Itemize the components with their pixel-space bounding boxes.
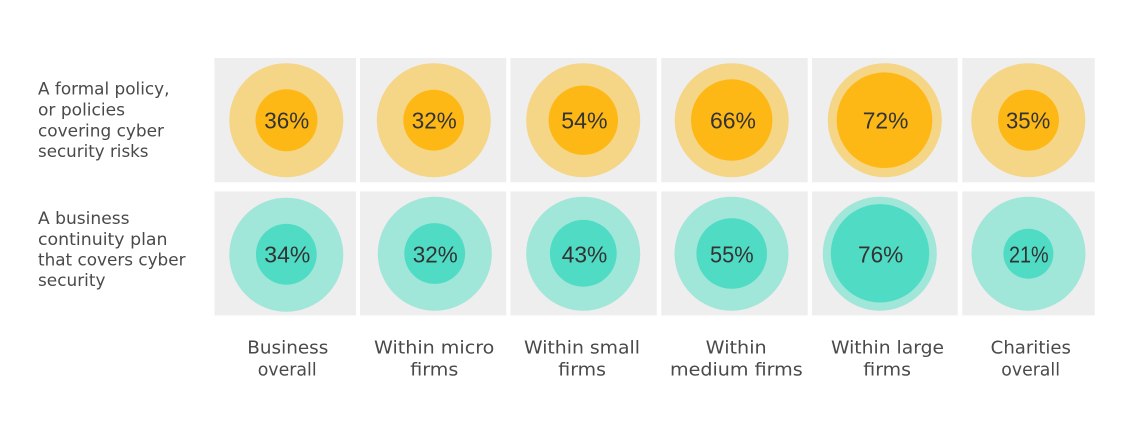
column label: within large firms	[831, 338, 944, 381]
row label: business continuity plan: security	[38, 270, 106, 290]
panel: policy, large firms	[812, 58, 958, 182]
panel: continuity, large firms	[812, 191, 958, 315]
panel: policy, micro firms: 32%	[412, 107, 457, 133]
column label: charities overall: overall	[1001, 361, 1060, 381]
row label: business continuity plan: A business	[38, 208, 130, 228]
panel: policy, large firms: 72%	[863, 107, 908, 133]
column label: within micro firms: firms	[410, 361, 458, 381]
panel: continuity, small firms	[510, 191, 657, 315]
panel: continuity, micro firms	[360, 191, 506, 315]
panel: continuity, micro firms: 32%	[413, 241, 458, 267]
column label: business overall: Business	[247, 338, 328, 358]
panel: policy, business overall	[214, 58, 356, 182]
panel: policy, small firms	[510, 58, 657, 182]
column label: business overall: overall	[258, 361, 317, 381]
column label: within small firms: Within small	[524, 338, 640, 358]
panel: continuity, business overall	[214, 191, 356, 315]
panel: policy, medium firms: 66%	[710, 107, 756, 133]
column label: within medium firms: Within	[706, 338, 767, 358]
column label: within medium firms	[670, 338, 803, 381]
panel: policy, small firms: 54%	[561, 107, 608, 133]
panel: policy, medium firms	[661, 58, 808, 182]
panel: continuity, charities overall	[962, 191, 1095, 315]
panel: policy, charities overall	[962, 58, 1095, 182]
row label: business continuity plan: continuity plan	[38, 229, 168, 249]
panel: policy, charities overall: 35%	[1006, 107, 1050, 133]
column label: within small firms	[524, 338, 640, 381]
row label: formal policy	[38, 78, 170, 161]
row label: formal policy: A formal policy,	[38, 78, 170, 98]
column label: within small firms: firms	[558, 361, 606, 381]
panel: policy, business overall: 36%	[264, 107, 309, 133]
row label: business continuity plan	[38, 208, 186, 290]
column label: within micro firms: Within micro	[374, 338, 494, 358]
panel: continuity, medium firms	[661, 191, 808, 315]
row label: business continuity plan: that covers cyber	[38, 250, 186, 270]
column label: charities overall	[991, 338, 1071, 381]
panel: continuity, medium firms: 55%	[710, 241, 754, 267]
column label: business overall	[247, 338, 328, 381]
row label: formal policy: security risks	[38, 141, 148, 161]
column label: within large firms: firms	[863, 361, 911, 381]
column label: within medium firms: medium firms	[670, 361, 803, 381]
panel: continuity, business overall: 34%	[264, 241, 310, 267]
column label: within large firms: Within large	[831, 338, 944, 358]
panel: policy, micro firms	[360, 58, 506, 182]
panel: continuity, charities overall: 21%	[1009, 241, 1049, 267]
column label: within micro firms	[374, 338, 494, 381]
panel: continuity, large firms: 76%	[858, 241, 903, 267]
column label: charities overall: Charities	[991, 338, 1071, 358]
row label: formal policy: or policies	[38, 99, 125, 119]
panel: continuity, small firms: 43%	[562, 241, 607, 267]
row label: formal policy: covering cyber	[38, 120, 164, 140]
